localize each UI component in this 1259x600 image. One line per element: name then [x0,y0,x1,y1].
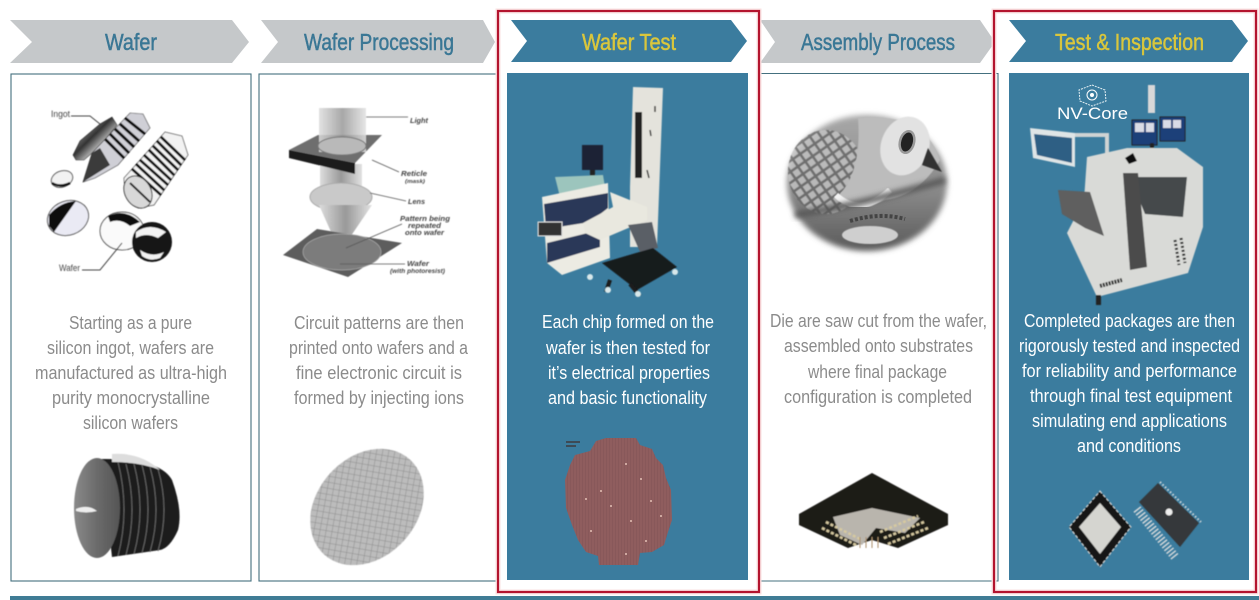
icon: photolithography diagram: Wafer [407,261,430,268]
text: Wafer Test description: Each chip formed on the [542,311,714,332]
chevron: Wafer Processing [261,20,495,63]
text: Test and Inspection description: through final test equipment [1030,385,1232,406]
icon: NV-Core logo [1057,85,1128,123]
icon: wafer map [565,438,672,565]
icon: photolithography diagram: Reticle [401,171,427,178]
text: Wafer Processing description: Circuit patterns are then [294,312,464,333]
icon: photolithography diagram: Lens [408,199,425,206]
icon: photolithography diagram: (with photoresist) [390,269,445,275]
panel box: Test and Inspection [1009,73,1249,580]
chevron: Test and Inspection [1009,20,1248,62]
text: Test and Inspection description: simulating end applications [1032,410,1227,431]
icon: photolithography diagram: (mask) [405,179,425,185]
heading: Wafer: Wafer [105,29,157,55]
panel: Wafer [10,20,251,581]
icon: photolithography diagram: Light [410,118,429,125]
icon: ingots and wafers: Wafer [59,263,80,273]
icon: ingots and wafers: Ingot [51,109,70,119]
text: Wafer Processing description [289,312,469,408]
icon: IC chips [1069,482,1201,567]
chevron: Wafer [10,20,249,63]
panel box: Wafer Processing [259,74,499,581]
text: Assembly Process description: Die are saw cut from the wafer, [770,310,987,331]
panel: Wafer Test [507,20,748,580]
text: Wafer Test description [542,311,714,408]
text: Assembly Process description: where final package [807,361,947,382]
heading: Assembly Process: Assembly Process [801,29,955,55]
text: Wafer description: manufactured as ultra-high [35,362,227,383]
icon: ingots and wafers [42,109,188,273]
text: Wafer Test description: and basic functionality [548,387,708,408]
highlight frame: Wafer Test [498,11,759,592]
text: Wafer description: Starting as a pure [69,312,192,333]
icon: photolithography diagram: onto wafer [405,230,445,237]
text: Wafer description: purity monocrystalline [52,387,210,408]
text: Wafer description [35,312,227,433]
icon: patterned wafer [287,426,447,588]
heading: Wafer Processing: Wafer Processing [304,29,454,55]
icon: NV-Core logo: NV-Core [1057,104,1128,123]
icon: package cross-section [799,473,948,548]
text: Wafer description: silicon ingot, wafers are [47,337,214,358]
text: Wafer Processing description: formed by injecting ions [294,387,464,408]
icon: final test handler machine [1030,85,1203,305]
text: Test and Inspection description [1019,310,1240,456]
icon: wafer stack [74,454,180,558]
panel: Wafer Processing [259,20,499,588]
icon: photolithography diagram: repeated [408,223,442,230]
icon: photolithography diagram [283,108,451,277]
highlight frame: Test and Inspection [994,11,1256,592]
chevron: Assembly Process [760,20,995,63]
text: Wafer description: silicon wafers [83,412,178,433]
heading: Wafer Test: Wafer Test [582,29,677,55]
panel: Assembly Process [760,20,998,581]
text: Wafer Processing description: fine electronic circuit is [296,362,462,383]
text: Test and Inspection description: and conditions [1077,435,1181,456]
text: Assembly Process description [770,310,987,407]
panel: Test and Inspection [1009,20,1249,580]
text: Assembly Process description: configuration is completed [784,386,972,407]
text: Wafer Test description: it’s electrical properties [548,362,710,383]
icon: photolithography diagram: Pattern being [400,216,451,223]
panel box: Wafer [11,74,251,581]
icon: wafer prober machine [538,87,678,297]
heading: Test and Inspection: Test & Inspection [1055,29,1204,55]
panel box: Wafer Test [507,73,748,580]
panel box: Assembly Process [760,74,998,581]
bottom bar [10,596,1259,600]
icon: wafer saw photo [787,110,947,251]
text: Assembly Process description: assembled onto substrates [784,335,973,356]
text: Wafer Test description: wafer is then tested for [545,337,710,358]
chevron: Wafer Test [511,20,747,62]
text: Test and Inspection description: for reliability and performance [1022,360,1237,381]
text: Wafer Processing description: printed onto wafers and a [289,337,469,358]
